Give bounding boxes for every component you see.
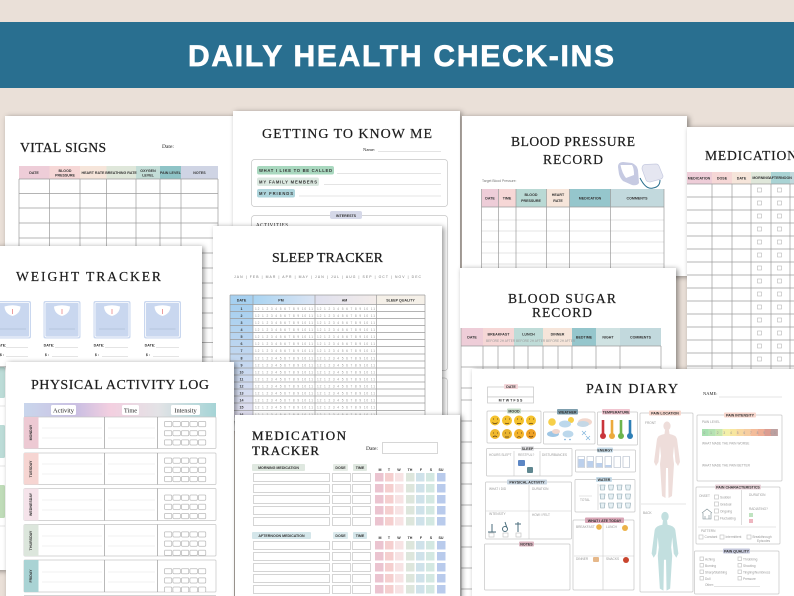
panel: getting to know me: Name: [363,147,375,152]
section: pain location: BACK [643,511,653,515]
row: thursday: THURSDAY [29,530,33,550]
form box: names: MY FAMILY MEMBERS [259,180,317,184]
section: sleep: SLEEP [522,447,534,451]
heading: pain diary: PAIN DIARY [586,382,678,397]
icon: mood faces [490,416,536,439]
afternoon medication table: F [420,536,423,540]
table: vital signs: OXYGEN [140,169,156,173]
table: vital signs: BLOOD [59,169,72,173]
table: medication checklist: MORNING [752,176,770,180]
morning medication table [252,464,446,526]
table: sleep log: 13 [240,392,244,396]
section: notes: NOTES [520,542,533,546]
afternoon medication table: AFTERNOON MEDICATION [258,534,305,538]
table: sleep log: 16 [240,413,244,417]
table: vital signs: DATE [29,171,39,175]
table: blood pressure: MEDICATION [579,196,602,200]
table: sleep log: 12 1 2 3 4 5 6 7 8 9 10 11 [255,398,313,402]
section: pain characteristics: ONSET [699,494,710,498]
table: sleep log: 12 1 2 3 4 5 6 7 8 9 10 11 [317,406,375,410]
morning medication table: M [378,468,382,472]
table header: Activity [53,408,75,414]
table: blood pressure: RATE [553,199,563,203]
table: medication checklist: DOSE [717,176,728,180]
section: physical activity: INTENSITY [489,512,507,516]
row: friday [24,560,216,592]
icon: thumbs [518,460,533,473]
section: pain quality: PAIN QUALITY [724,550,750,554]
morning medication table: DOSE [335,466,346,470]
section: pain intensity: PAIN LEVEL [702,420,720,424]
heading: vital signs: VITAL SIGNS [20,140,106,155]
table: sleep log: 12 1 2 3 4 5 6 7 8 9 10 11 [255,370,313,374]
morning medication table: TIME [356,466,365,470]
table header: Time [124,408,137,414]
table: sleep log: 12 1 2 3 4 5 6 7 8 9 10 11 [317,356,375,360]
section: what i ate: LUNCH [606,525,618,529]
table: sleep log: DATE [237,298,247,302]
table: sleep log: 1 [240,307,242,311]
form box: interests: ACTIVITIES [256,224,288,228]
row: wednesday [24,488,216,520]
icon: batteries [578,456,630,468]
table: sleep log: 12 1 2 3 4 5 6 7 8 9 10 11 [255,392,313,396]
table: blood sugar: DATE [467,336,477,340]
table: sleep log: 10 [240,370,244,374]
table: blood pressure: PRESSURE [521,199,541,203]
table: sleep log: 12 1 2 3 4 5 6 7 8 9 10 11 [255,364,313,368]
table: sleep log: 12 1 2 3 4 5 6 7 8 9 10 11 [317,328,375,332]
table: sleep log: 12 1 2 3 4 5 6 7 8 9 10 11 [255,321,313,325]
weight date labels: $ : [146,353,150,357]
form box: names: WHAT I LIKE TO BE CALLED [259,168,332,173]
section: physical activity [486,480,572,539]
table: sleep log: 12 1 2 3 4 5 6 7 8 9 10 11 [255,328,313,332]
section: pain quality: Sharp/Stabbing [705,570,727,574]
section: what i ate [573,518,634,590]
weight date labels: $ : [45,353,49,357]
panel: blood pressure record: RECORD [543,152,603,167]
section: pain quality: Dull [705,577,711,581]
table: vital signs: LEVEL [142,174,155,178]
table: vital signs: PRESSURE [55,174,75,178]
icon: exercise figures [488,522,521,532]
heading: medication tracker: MEDICATION [252,428,347,443]
table: medication checklist [687,172,794,372]
table: sleep log: 12 1 2 3 4 5 6 7 8 9 10 11 [317,370,375,374]
table: sleep log: AM [342,298,347,302]
section: physical activity: PHYSICAL ACTIVITY [509,480,545,484]
table: sleep log: 12 1 2 3 4 5 6 7 8 9 10 11 [317,314,375,318]
weight date labels: DATE: [145,344,155,348]
row: thursday [24,524,216,556]
panel: blood sugar record [460,268,676,596]
table: sleep log: 12 1 2 3 4 5 6 7 8 9 10 11 [317,342,375,346]
afternoon medication table [252,532,446,594]
section: pain quality: Shooting [743,564,756,568]
weight date labels: $ : [0,353,4,357]
weight date labels [0,344,179,357]
panel: pain diary [472,369,794,596]
table: sleep log: 3 [240,321,242,325]
afternoon medication table: TIME [356,534,365,538]
icon: body back [652,512,678,591]
section: date: DATE [506,385,516,389]
panel: sleep tracker [213,226,442,421]
section: pain quality [694,548,779,594]
table: blood sugar: BEFORE [516,339,529,343]
table: sleep log: 12 1 2 3 4 5 6 7 8 9 10 11 [317,321,375,325]
morning medication table: TH [408,468,413,472]
section: what i ate: DINNER [576,557,589,561]
table: blood sugar: LUNCH [522,332,535,336]
panel: medication chart [687,127,794,377]
table: sleep log: 12 1 2 3 4 5 6 7 8 9 10 11 [255,384,313,388]
form box: interests: INTERESTS [336,214,357,218]
table: sleep log: 12 1 2 3 4 5 6 7 8 9 10 11 [317,384,375,388]
panel: weight tracker [0,246,202,366]
section: temperature [598,409,638,445]
section: pain characteristics: RADIATING? [749,507,768,511]
icon: scale 3 [94,301,130,338]
section: pain quality: Aching [705,557,715,561]
section: pain intensity: WHAT MADE THE PAIN WORSE [702,442,749,446]
section: pain characteristics: PAIN CHARACTERISTICS [716,486,760,490]
section: water: WATER [598,478,611,482]
section: date [488,384,534,403]
pain level scale: 0 1 2 3 4 5 6 7 8 9 10 [704,431,776,435]
table: sleep log: SLEEP QUALITY [386,298,415,302]
table: sleep log: 12 1 2 3 4 5 6 7 8 9 10 11 [255,378,313,382]
table: blood pressure: COMMENTS [627,196,648,200]
heading: blood sugar record: BLOOD SUGAR [508,291,617,306]
morning medication table: SU [438,468,444,472]
table: sleep log: 12 1 2 3 4 5 6 7 8 9 10 11 [255,406,313,410]
section: physical activity: DURATION [532,487,549,491]
table: blood pressure: DATE [485,196,495,200]
morning medication table: T [388,468,391,472]
section: pain characteristics: Intermittent [726,535,742,539]
panel: side scale page [0,362,6,570]
weight date labels: DATE: [44,344,54,348]
table: blood pressure: HEART [552,193,565,197]
table header: Intensity [174,408,197,414]
icon: blood pressure monitor [618,162,663,188]
table: vital signs: NOTES [193,171,206,175]
section: pain characteristics [696,484,780,544]
section: pain intensity: WHAT MADE THE PAIN BETTER [702,464,751,468]
section: energy [576,448,636,472]
section: what i ate: WHAT I ATE TODAY [588,519,622,523]
form box: names: MY FRIENDS [259,191,293,196]
section: pain intensity: PAIN INTENSITY [726,414,755,418]
table: vital signs: PAIN LEVEL [160,171,182,175]
table: sleep log [230,295,425,418]
heading: blood pressure record: BLOOD PRESSURE [511,134,635,149]
table: sleep log: 12 1 2 3 4 5 6 7 8 9 10 11 [317,349,375,353]
panel: pain diary: NAME: [703,391,718,396]
section: water [575,477,635,512]
table: blood sugar: BEFORE [546,339,559,343]
section: physical activity: HOW I FELT [532,513,550,517]
table: sleep log: PM [278,298,284,302]
weight date labels: DATE: [94,344,104,348]
section: pain quality: Burning [705,564,716,568]
afternoon medication table: DOSE [335,534,346,538]
heading: physical activity log: PHYSICAL ACTIVITY LOG [31,378,209,393]
table: sleep log: 12 1 2 3 4 5 6 7 8 9 10 11 [317,364,375,368]
title banner [0,22,794,88]
section: water: TOTAL [580,498,590,502]
table: blood sugar: DINNER [551,332,565,336]
table: sleep log: 12 1 2 3 4 5 6 7 8 9 10 11 [255,335,313,339]
table: blood sugar: 2H AFTER [560,339,576,343]
table: blood sugar: BEFORE [486,339,499,343]
section: date: M T W T F S S [499,398,523,402]
panel: blood sugar record: RECORD [532,305,592,320]
section: sleep: DISTURBANCES [542,453,567,457]
afternoon medication table: T [388,536,391,540]
panel: medication tracker [235,415,460,596]
table: sleep log: 5 [240,335,242,339]
icon: food [593,524,629,563]
section: pain intensity [697,412,782,481]
icon: scale 2 [44,301,80,338]
afternoon medication table: M [378,536,382,540]
table: sleep log: 12 1 2 3 4 5 6 7 8 9 10 11 [317,413,375,417]
table: sleep log: 12 1 2 3 4 5 6 7 8 9 10 11 [317,378,375,382]
table: sleep log: 12 1 2 3 4 5 6 7 8 9 10 11 [255,342,313,346]
table: sleep log: 14 [240,398,244,402]
icon: body front [654,422,680,498]
row: monday: MONDAY [29,424,33,440]
morning medication table: F [420,468,423,472]
table: sleep log: 12 [240,384,244,388]
section: notes [484,542,570,590]
table: sleep log: 7 [240,349,242,353]
table: medication checklist: MEDICATION [688,176,711,180]
form box: interests [252,211,448,428]
section: weather [544,409,595,444]
section: pain quality: Tingling/Numbness [743,570,771,574]
section: pain characteristics: Fluctuating [720,516,736,520]
table: sleep log: 15 [240,406,244,410]
table: sleep log: 12 1 2 3 4 5 6 7 8 9 10 11 [255,413,313,417]
weight date labels: $ : [95,353,99,357]
section: pain location: PAIN LOCATION [651,412,679,416]
section: pain characteristics: Gradual [720,502,732,506]
table: sleep log: 2 [240,314,242,318]
section: sleep: RESTFUL? [518,453,535,457]
section: temperature: TEMPERATURE [602,410,630,414]
table: blood sugar: COMMENTS [630,336,652,340]
form box: names [252,160,448,206]
table: blood pressure [482,189,664,272]
heading: weight tracker: WEIGHT TRACKER [16,269,162,284]
table: blood pressure: TIME [503,196,512,200]
heading: sleep tracker: SLEEP TRACKER [272,251,384,266]
afternoon medication table: TH [408,536,413,540]
row: wednesday: WEDNESDAY [29,492,33,516]
table: blood pressure: BLOOD [525,193,538,197]
table: sleep log: 12 1 2 3 4 5 6 7 8 9 10 11 [255,356,313,360]
table: blood sugar: BEDTIME [576,336,593,340]
table: sleep log: 6 [240,342,242,346]
heading: getting to know me: GETTING TO KNOW ME [262,127,432,142]
panel: physical activity log [6,362,234,596]
section: pain characteristics: Breakthrough [752,535,772,539]
table: vital signs: HEART RATE [82,171,105,175]
row: tuesday [24,453,216,484]
panel: medication tracker: TRACKER [252,443,319,458]
section: pain characteristics: DURATION [749,493,766,497]
afternoon medication table: SU [438,536,444,540]
table: sleep log: 4 [240,328,242,332]
section: weather: WEATHER [559,410,577,414]
table: blood sugar: BREAKFAST [488,332,510,336]
icon: scale 1 [0,301,31,338]
section: pain characteristics: Ongoing [720,510,732,514]
morning medication table: S [430,468,433,472]
morning medication table: MORNING MEDICATION [258,466,299,470]
table: sleep log: 11 [240,378,243,382]
row: friday: FRIDAY [29,569,33,583]
row: tuesday: TUESDAY [29,460,33,477]
section: pain location [640,410,693,592]
table: sleep log: 12 1 2 3 4 5 6 7 8 9 10 11 [317,307,375,311]
table: blood sugar: 2H AFTER [530,339,546,343]
icon: weather symbols [547,417,592,440]
table: medication checklist: DATE [737,176,747,180]
section: sleep: HOURS SLEPT [489,453,512,457]
afternoon medication table: W [397,536,401,540]
section: sleep [486,446,572,476]
icon: scale 4 [144,301,181,338]
section: pain characteristics: Episodes [757,539,771,543]
section: pain characteristics: Sudden [720,496,731,500]
panel: vital signs [5,116,235,416]
table: sleep log: 12 1 2 3 4 5 6 7 8 9 10 11 [255,349,313,353]
section: what i ate: BREAKFAST [576,525,595,529]
morning medication table: W [397,468,401,472]
table: blood sugar: NIGHT [602,336,614,340]
section: pain quality: Throbbing [743,557,758,561]
table: vital signs [19,166,218,372]
table: sleep log: 12 1 2 3 4 5 6 7 8 9 10 11 [317,398,375,402]
table: medication checklist: AFTERNOON [769,176,792,180]
section: what i ate: SNACKS [606,557,619,561]
panel: sleep tracker: JAN | FEB | MAR | APR | MAY | JUN | JUL | AUG | SEP | OCT | NOV | DEC [234,275,422,279]
section: pain location: FRONT [645,421,656,425]
icon: thermometers [600,420,633,439]
section: pain characteristics: Constant [704,535,717,539]
table header [24,403,216,417]
panel: medication tracker: Date: [366,446,378,452]
section: pain quality: Other: [705,583,714,587]
afternoon medication table: S [430,536,433,540]
table: sleep log: 12 1 2 3 4 5 6 7 8 9 10 11 [317,392,375,396]
panel: blood pressure record [462,116,687,276]
icon: water glasses [600,485,630,508]
table: sleep log: 8 [240,356,242,360]
table: sleep log: 12 1 2 3 4 5 6 7 8 9 10 11 [317,335,375,339]
icon: pain chart [702,509,712,519]
table: blood sugar [461,328,661,596]
section: pain quality: Pressure [743,577,756,581]
table: blood sugar: 2H AFTER [500,339,516,343]
table: vital signs: BREATHING RATE [105,171,137,175]
title banner: DAILY HEALTH CHECK-INS [188,40,614,73]
section: energy: ENERGY [597,448,613,452]
panel: getting to know me [233,111,460,431]
table: sleep log: 12 1 2 3 4 5 6 7 8 9 10 11 [255,314,313,318]
section: mood [487,408,541,443]
table: sleep log: 12 1 2 3 4 5 6 7 8 9 10 11 [255,307,313,311]
section: pain characteristics: PATTERN [701,529,716,533]
section: physical activity: WHAT I DID [489,487,507,491]
table: sleep log: 9 [240,364,242,368]
panel: blood pressure record: Target Blood Pressure: [482,179,517,183]
row: monday [24,417,216,448]
section: mood: MOOD [508,410,520,414]
panel: vital signs: Date: [162,144,174,150]
